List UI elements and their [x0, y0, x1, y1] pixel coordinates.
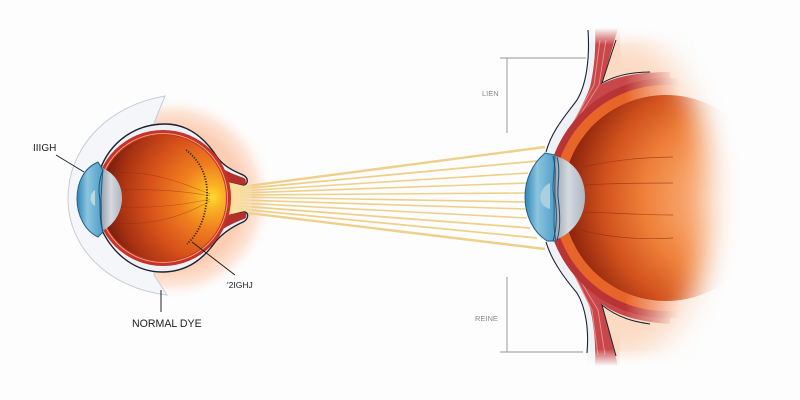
cornea layer lines	[553, 156, 560, 241]
red choroid ring	[95, 130, 231, 266]
skin outline	[546, 30, 589, 353]
lower tissue outline	[602, 305, 650, 356]
vitreous fibres	[112, 173, 210, 224]
cornea inner lines	[99, 170, 103, 232]
upper tissue outline	[602, 40, 650, 83]
eye anatomy infographic	[34, 28, 730, 366]
left eye label: retina: '2IGHJ	[227, 280, 253, 290]
orange ring	[560, 85, 670, 311]
peach tissue	[602, 30, 708, 364]
light rays	[240, 147, 545, 249]
rings fading to the right	[554, 28, 676, 366]
bottom bracket with label	[475, 277, 583, 352]
right eye: enlarged cross-section	[524, 28, 730, 366]
retina dotted arc	[186, 150, 207, 244]
globe fibres	[580, 157, 673, 239]
sclera outline and optic tabs	[100, 124, 248, 272]
upper muscle band	[574, 28, 670, 121]
inner globe	[100, 135, 226, 261]
iris bump left	[90, 190, 95, 206]
red choroid tabs	[216, 164, 246, 185]
muscle stripes	[572, 40, 606, 355]
red ring	[554, 78, 676, 318]
top bracket with label: LIEN	[482, 89, 499, 98]
pale ring	[98, 134, 228, 262]
cornea	[525, 153, 556, 241]
iris bump	[540, 183, 550, 209]
bottom bracket with label: REINE	[475, 314, 498, 323]
left eye label: normal eye	[132, 290, 202, 330]
left eye: normal eye cross-section	[68, 96, 252, 295]
lens	[552, 155, 585, 241]
top bracket with label	[482, 58, 586, 133]
globe	[568, 95, 726, 301]
fading globe group	[546, 28, 730, 366]
outer crescent	[68, 96, 167, 295]
left eye label: top	[33, 143, 84, 172]
cornea	[77, 162, 103, 237]
glow behind left eye	[70, 96, 274, 300]
left eye label: top: IIIGH	[33, 143, 56, 154]
lens	[100, 167, 122, 232]
left eye label: retina	[192, 242, 253, 290]
left eye label: normal eye: NORMAL DYE	[132, 318, 202, 330]
white skin band	[546, 38, 595, 356]
lower muscle band	[576, 277, 670, 366]
yellow light opening	[220, 180, 252, 217]
